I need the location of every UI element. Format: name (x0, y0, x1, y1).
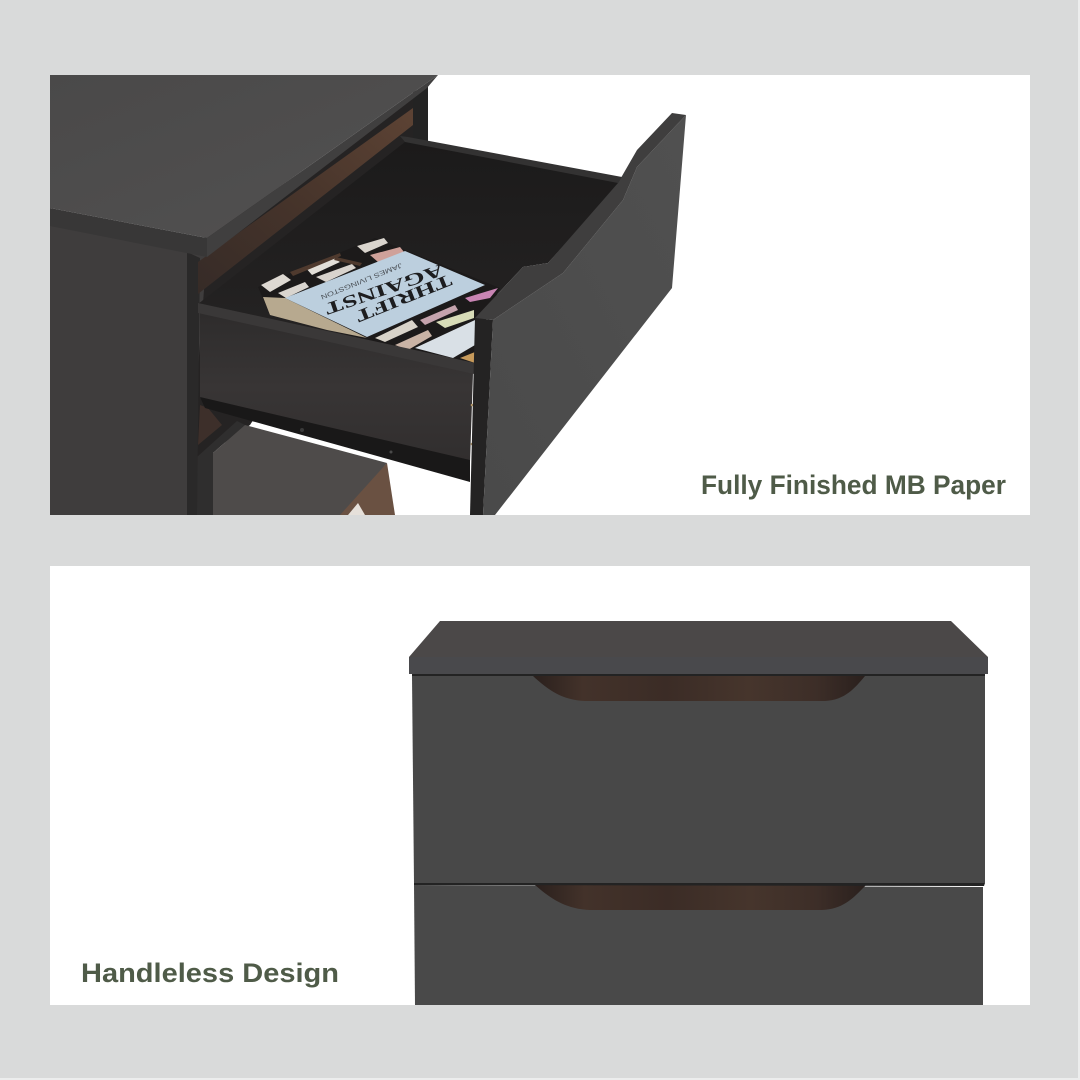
drawer side top edge (475, 113, 686, 320)
wooden leg (335, 463, 395, 515)
dark cabinet recess (187, 85, 428, 462)
top surface (409, 621, 988, 657)
panel: handleless design (50, 566, 1030, 1005)
book author: JAMES LIVINGSTON (319, 261, 403, 300)
recessed wood handle (535, 885, 866, 910)
cabinet top (409, 621, 988, 676)
label: fully finished MB paper: Fully Finished MB Paper (701, 470, 1006, 500)
book title line 2: THRIFT (352, 270, 455, 326)
top front edge (409, 657, 988, 674)
cabinet body (50, 85, 428, 515)
drawer side panel (400, 113, 686, 515)
blue cover label (285, 251, 485, 337)
cabinet top (50, 75, 438, 257)
lower cover artwork (375, 288, 498, 363)
lower drawer (197, 421, 387, 515)
drawer rim (198, 303, 475, 374)
top side edge (207, 75, 438, 257)
book in drawer (258, 238, 500, 366)
drawer side outer face (483, 115, 686, 515)
slide rail (200, 397, 470, 482)
upper drawer front (412, 676, 985, 883)
drawer inner panel with rim and slide rail (198, 303, 475, 482)
lower drawer front (414, 885, 983, 1005)
panel: fully finished MB paper (50, 75, 1030, 515)
book cover (258, 238, 500, 366)
drawer side front edge (470, 318, 493, 515)
book title line 1: AGAINST (321, 260, 446, 319)
back rim of drawer (400, 136, 622, 183)
gap between drawers (414, 883, 985, 886)
spine artwork (261, 238, 404, 298)
open drawer interior (198, 138, 623, 366)
top surface (50, 75, 438, 238)
recessed wood handle (533, 676, 865, 701)
top front edge (50, 208, 207, 257)
book pages (263, 297, 367, 338)
label: handleless design: Handleless Design (81, 958, 339, 988)
